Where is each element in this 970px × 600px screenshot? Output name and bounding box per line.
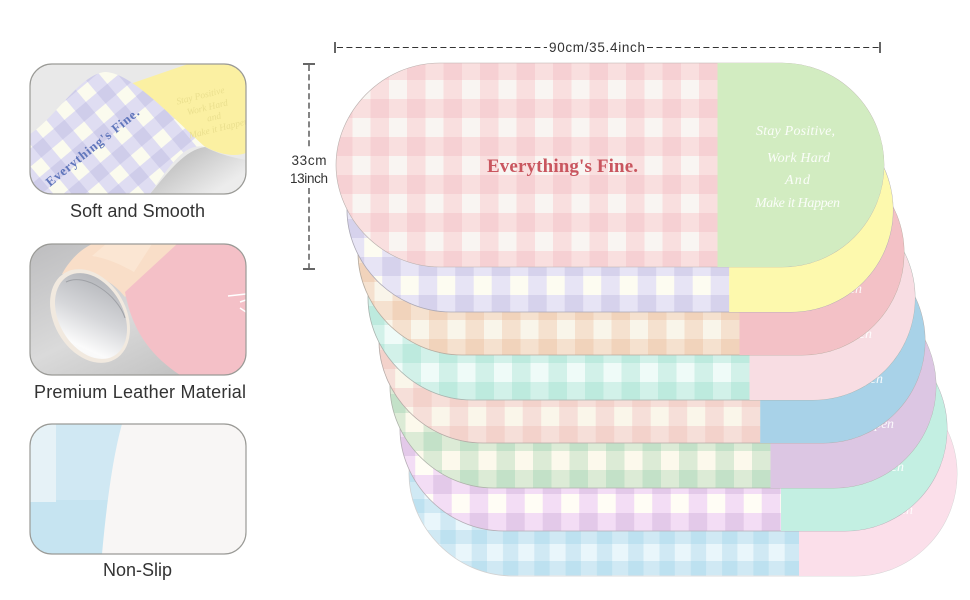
lavender gingham sheet bbox=[30, 72, 205, 194]
caption: premium leather material: Premium Leather Material bbox=[34, 382, 246, 402]
caption: non-slip: Non-Slip bbox=[103, 560, 172, 580]
mat slogan on yellow: and bbox=[206, 111, 223, 125]
mat slogan: Stay Positive, bbox=[756, 124, 835, 139]
panel: soft and smooth photo bbox=[30, 64, 250, 194]
white textured back bbox=[102, 424, 246, 554]
mat slogan: Make it Happen bbox=[754, 196, 840, 211]
mat 5: salmon gingham with blue end bbox=[379, 239, 925, 443]
mat 5: salmon gingham with blue end: Make it Happen bbox=[797, 372, 883, 387]
mat 3: peach gingham with salmon end: Make it Happen bbox=[776, 282, 862, 297]
mat title: Everything's Fine. bbox=[487, 156, 638, 177]
mat slogan: Work Hard bbox=[767, 151, 831, 166]
mat slogan on yellow: Work Hard bbox=[186, 98, 229, 118]
height label: 33cm bbox=[292, 153, 326, 168]
mat title on sheet: Everything's Fine. bbox=[42, 105, 142, 189]
yellow underside of mat bbox=[130, 64, 246, 155]
mat 1: pink gingham with green end bbox=[336, 63, 884, 267]
mat slogan on yellow: Make it Happen bbox=[187, 117, 250, 142]
caption: soft and smooth: Soft and Smooth bbox=[70, 201, 205, 221]
mat 7: purple gingham with mint end bbox=[400, 327, 947, 531]
roll opening bbox=[50, 269, 130, 363]
panel: non-slip texture photo bbox=[30, 424, 246, 554]
mat slogan on yellow bbox=[177, 88, 246, 138]
mat 4: mint gingham with light pink end: Make it Happen bbox=[786, 327, 872, 342]
mat 8: blue gingham with pink end bbox=[409, 372, 957, 576]
mat 6: green gingham with purple end: Make it Happen bbox=[808, 417, 894, 432]
panel: premium leather roll photo bbox=[30, 244, 246, 377]
white mark on pink sheet bbox=[228, 294, 246, 312]
height label inches: 13inch bbox=[290, 171, 328, 186]
width label: 90cm/35.4inch bbox=[549, 40, 645, 55]
mat 2: lavender gingham with yellow end bbox=[347, 108, 893, 312]
peach outside of roll bbox=[62, 244, 178, 297]
mat slogan on yellow: Stay Positive bbox=[175, 86, 226, 107]
mat 8: blue gingham with pink end: Make it Happen bbox=[827, 503, 913, 518]
mat 7: purple gingham with mint end: Make it Happen bbox=[818, 460, 904, 475]
mat 3: peach gingham with salmon end bbox=[358, 151, 904, 355]
mat slogan bbox=[754, 124, 840, 211]
mat slogan: And bbox=[784, 173, 811, 188]
width dimension line bbox=[335, 40, 880, 55]
height dimension line bbox=[292, 64, 326, 269]
mat 6: green gingham with purple end bbox=[390, 284, 936, 488]
pink rolled sheet bbox=[125, 244, 246, 375]
mat 4: mint gingham with light pink end bbox=[368, 196, 915, 400]
